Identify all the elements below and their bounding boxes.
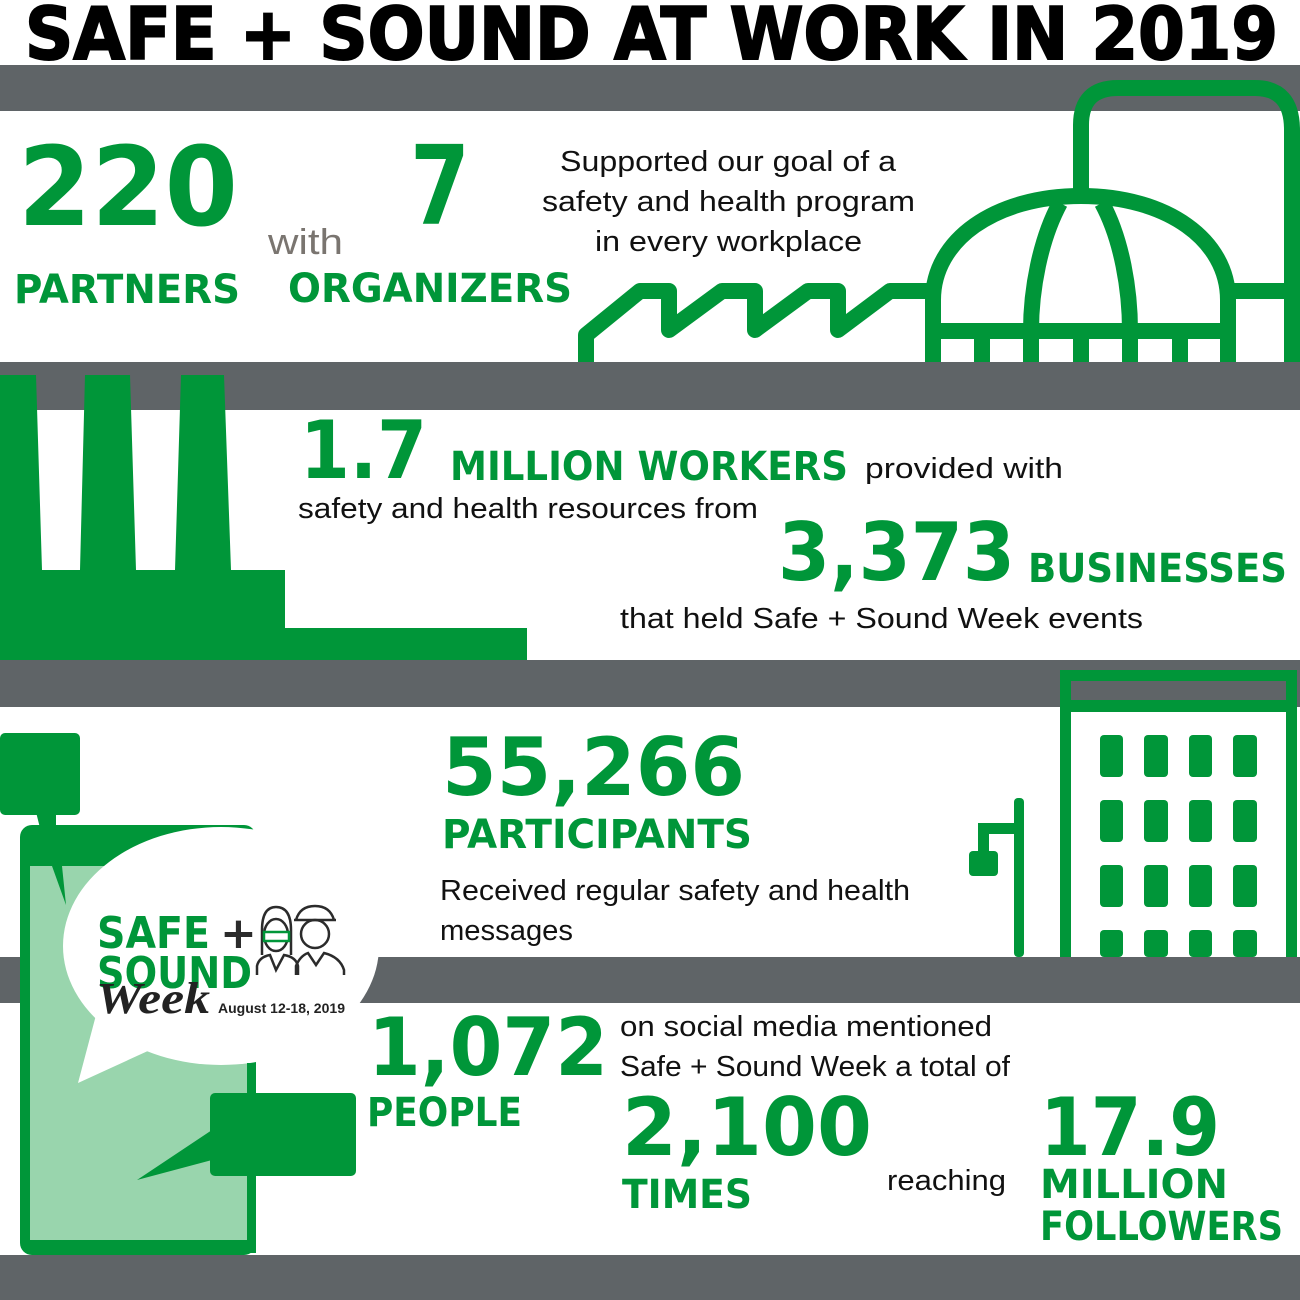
text: supported goal: Supported our goal of a (560, 146, 897, 178)
stat: 55,266 participants (442, 721, 752, 858)
text: events: that held Safe + Sound Week events (620, 603, 1143, 635)
stat: 55,266 participants: PARTICIPANTS (442, 812, 752, 858)
panel: social media (367, 1001, 1283, 1250)
text: provided with: safety and health resources from (298, 493, 758, 525)
logo: safe + sound week: SAFE (97, 908, 210, 959)
text: received messages (440, 875, 910, 947)
stat: 1.7 million workers: MILLION WORKERS (450, 444, 848, 490)
text: provided with (298, 453, 1063, 525)
text: supported goal (542, 146, 915, 258)
logo: safe + sound week (96, 906, 345, 1023)
stat: 7 organizers: ORGANIZERS (288, 266, 572, 312)
stat: 7 organizers (288, 122, 572, 312)
panel: participants (440, 670, 1297, 957)
stat: 220 partners: 220 (18, 123, 238, 251)
text: mentioned: Safe + Sound Week a total of (620, 1051, 1011, 1083)
speech bubble top-left (0, 733, 80, 828)
logo: safe + sound week: + (220, 908, 257, 959)
text: supported goal: in every workplace (595, 226, 862, 258)
stat: 1.7 million workers: 1.7 (300, 404, 427, 497)
icon: worker figures (257, 906, 344, 975)
stat: 1,072 people: PEOPLE (367, 1090, 522, 1136)
stat: 55,266 participants: 55,266 (442, 721, 745, 814)
stat: 220 partners: PARTNERS (14, 267, 240, 313)
text: mentioned (620, 1011, 1011, 1083)
stat: 2,100 times: TIMES (622, 1172, 752, 1218)
panel: partners (14, 88, 1292, 362)
text: provided with: provided with (865, 453, 1063, 485)
icon: factory silhouette (0, 375, 527, 660)
stat: 3,373 businesses: 3,373 (778, 506, 1015, 599)
text: mentioned: on social media mentioned (620, 1011, 992, 1043)
stat: 3,373 businesses (778, 506, 1287, 599)
stat: 1.7 million workers (300, 404, 848, 497)
stat: 7 organizers: 7 (410, 122, 470, 250)
text: with: with (267, 221, 343, 262)
icon: capitol and factory outline (586, 88, 1292, 362)
white bubble (63, 827, 379, 1083)
stat: 17.9 million followers: 17.9 (1040, 1081, 1220, 1174)
stat: 1,072 people: 1,072 (368, 1001, 608, 1094)
icon: phone with speech bubbles (0, 733, 379, 1255)
stat: 2,100 times (622, 1081, 872, 1218)
text: supported goal: safety and health program (542, 186, 915, 218)
stat: 17.9 million followers: MILLION (1040, 1162, 1228, 1208)
panel: workers (0, 375, 1287, 660)
stat: 3,373 businesses: BUSINESSES (1028, 546, 1287, 592)
text: received messages: Received regular safety and health (440, 875, 910, 907)
logo: safe + sound week: SOUND (97, 948, 252, 999)
stat: 2,100 times: 2,100 (622, 1081, 872, 1174)
icon: office building with lamp (969, 670, 1297, 957)
stat: 17.9 million followers (1040, 1081, 1283, 1250)
speech bubble bottom-right (137, 1093, 356, 1180)
logo: safe + sound week: August 12-18, 2019 (218, 1000, 345, 1016)
stat: 1,072 people (367, 1001, 608, 1136)
stat: 220 partners (14, 123, 240, 313)
text: reaching: reaching (887, 1165, 1006, 1197)
logo: safe + sound week: Week (96, 974, 210, 1023)
text: received messages: messages (440, 915, 573, 947)
